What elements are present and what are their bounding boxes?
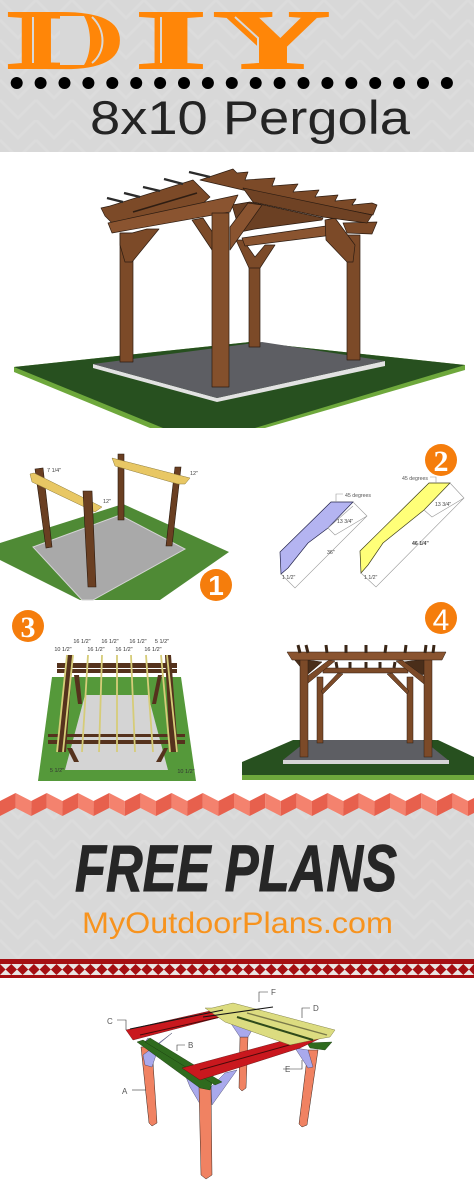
step 3 illustration <box>12 610 196 781</box>
part labels: D <box>313 1004 319 1013</box>
leaders <box>117 992 310 1090</box>
back and side posts <box>141 1037 318 1127</box>
dimensions: 16 1/2" <box>73 639 91 645</box>
concrete slab <box>93 342 385 402</box>
free plans panel <box>0 793 474 960</box>
lawn <box>0 504 229 600</box>
part labels: E <box>285 1065 290 1074</box>
badge 2 <box>425 444 457 478</box>
dimensions: 16 1/2" <box>87 647 105 653</box>
dimensions: 16 1/2" <box>101 639 119 645</box>
main pergola illustration <box>14 169 465 428</box>
zigzag banner <box>0 793 474 816</box>
braces <box>143 1022 313 1105</box>
blue brace: 13 3/4" <box>337 519 353 525</box>
lawn <box>242 740 474 780</box>
dimensions: 16 1/2" <box>115 647 133 653</box>
part labels: F <box>271 988 276 997</box>
badge 1 <box>200 569 232 601</box>
dimensions: 12" <box>103 499 111 505</box>
front post <box>83 491 96 587</box>
website: MyOutdoorPlans.com <box>82 907 393 940</box>
rafters <box>57 655 177 752</box>
blue brace: 45 degrees <box>345 493 371 499</box>
yellow brace: 1 1/2" <box>364 575 378 581</box>
badge 3 <box>12 610 44 644</box>
part labels: C <box>107 1017 113 1026</box>
yellow beams <box>30 458 190 512</box>
gravel slab <box>65 695 168 770</box>
dimensions <box>50 639 195 775</box>
dimensions <box>47 468 198 505</box>
dimensions: 5 1/2" <box>155 639 169 645</box>
badge 4 <box>425 602 457 637</box>
dotted divider <box>11 77 453 89</box>
header panel <box>0 0 474 152</box>
gravel slab <box>33 515 185 600</box>
dimensions: 16 1/2" <box>129 639 147 645</box>
beams and braces <box>48 655 185 762</box>
blue brace <box>280 493 371 588</box>
step 4 illustration <box>242 602 474 780</box>
part labels: B <box>188 1041 193 1050</box>
pergola structure <box>101 169 377 387</box>
part labels: A <box>122 1087 128 1096</box>
yellow brace <box>360 476 464 587</box>
top purlins <box>107 172 210 202</box>
step 2 illustration <box>280 444 464 588</box>
dimensions: 7 1/4" <box>47 468 61 474</box>
yellow brace: 13 3/4" <box>435 502 451 508</box>
dimensions: 5 1/2" <box>50 768 64 774</box>
subtitle: 8x10 Pergola <box>90 91 411 144</box>
diamond band <box>0 959 474 978</box>
step 1 illustration <box>0 454 232 601</box>
title: DIY <box>7 0 330 87</box>
lawn <box>14 342 465 428</box>
red beams <box>126 1008 323 1080</box>
front post <box>199 1087 212 1179</box>
slab <box>283 740 449 764</box>
dimensions: 10 1/2" <box>177 769 195 775</box>
badge 4: 4 <box>433 604 449 637</box>
posts <box>35 454 181 548</box>
dimensions: 10 1/2" <box>54 647 72 653</box>
badge 1: 1 <box>208 570 224 601</box>
part labels <box>107 988 319 1096</box>
dimensions: 16 1/2" <box>144 647 162 653</box>
black purlins <box>130 1007 273 1029</box>
green side beams <box>137 1038 332 1090</box>
yellow brace: 45 degrees <box>402 476 428 482</box>
badge 2: 2 <box>434 445 448 478</box>
yellow brace: 46 1/4" <box>412 541 429 547</box>
blue brace: 1 1/2" <box>282 575 296 581</box>
dimensions: 12" <box>190 471 198 477</box>
yellow rafters <box>205 1003 335 1045</box>
parts diagram <box>107 988 335 1179</box>
badge 3: 3 <box>20 611 36 644</box>
lawn <box>38 677 196 781</box>
blue brace: 36" <box>327 550 335 556</box>
pergola front view <box>287 652 446 757</box>
rafter ends <box>298 645 434 668</box>
